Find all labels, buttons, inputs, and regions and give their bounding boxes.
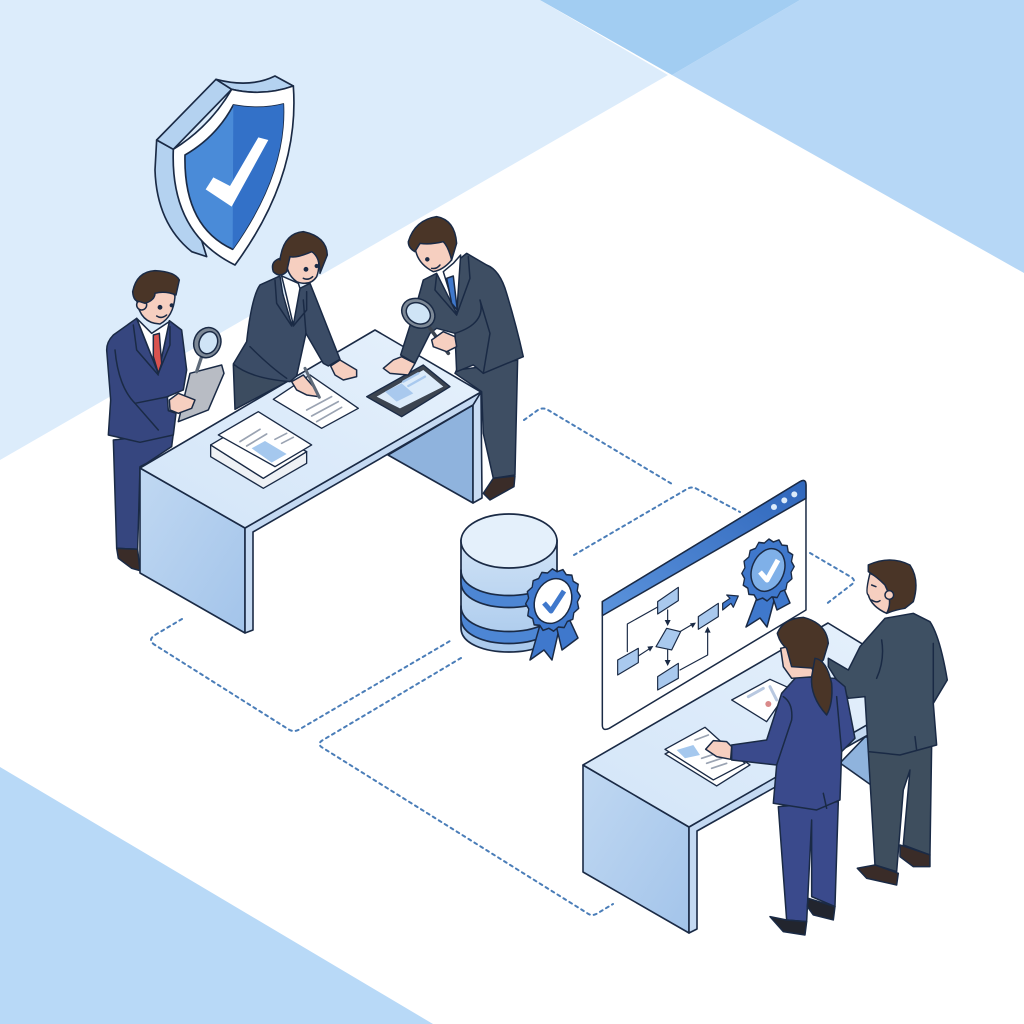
right hand [432, 332, 457, 352]
dashed flow paths [151, 408, 854, 915]
hand [169, 393, 195, 413]
jacket [107, 318, 187, 442]
tie [153, 333, 162, 373]
left hand [383, 357, 415, 375]
tablet on desk [367, 365, 450, 417]
shirt [137, 318, 169, 373]
icon: award ribbon on database [517, 561, 589, 660]
document on desk [273, 375, 358, 428]
icon: shield [155, 76, 294, 265]
magnifier [189, 323, 225, 372]
person: woman at desk [233, 232, 357, 397]
person: woman standing with ponytail [706, 617, 855, 935]
pen [305, 368, 319, 397]
person: woman skirt [233, 365, 297, 409]
person: left inspector legs [113, 433, 173, 571]
person: man standing right [828, 560, 947, 885]
person: left inspector upper body [107, 271, 225, 442]
head [137, 282, 175, 324]
tablet [178, 365, 224, 422]
flowchart [618, 587, 718, 690]
hands [292, 375, 318, 397]
head [286, 250, 319, 283]
magnifier [430, 328, 448, 353]
icon: database [461, 514, 557, 652]
person: right inspector leaning [383, 217, 523, 500]
desk: right [583, 623, 933, 933]
icon: award ribbon on screen [733, 531, 803, 627]
screen: workflow dashboard [602, 481, 806, 729]
documents on right desk [665, 679, 790, 786]
desk: left [140, 330, 482, 633]
head [415, 242, 452, 272]
paper stack [211, 412, 312, 488]
